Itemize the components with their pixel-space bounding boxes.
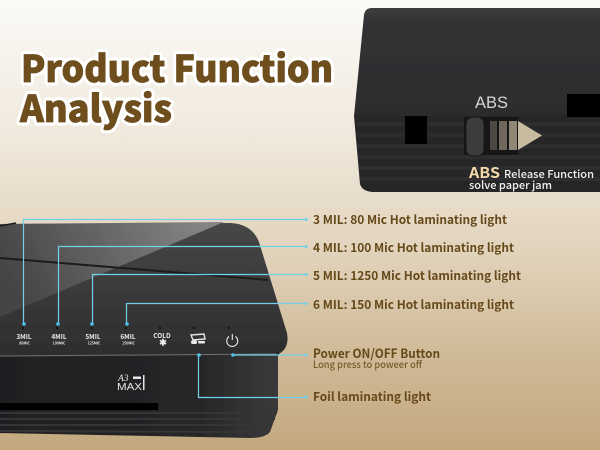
panel indicator dots — [22, 327, 230, 329]
glossy reflection — [0, 222, 224, 317]
laminator top face — [0, 223, 288, 357]
ABS caption: ABS — [468, 162, 500, 183]
panel labels: ✱ — [159, 336, 167, 348]
product photo: ABS release side of the laminator — [354, 8, 600, 192]
callout: 5 MIL — [90, 267, 521, 326]
callout: power button — [231, 343, 440, 371]
ABS slider knob — [466, 117, 484, 156]
feed slot — [0, 403, 158, 410]
callout: 4 MIL — [56, 239, 514, 326]
panel labels: 5MIL — [85, 331, 101, 341]
panel labels: 3MIL — [16, 331, 32, 341]
A3 MAX logo: A3 — [117, 374, 129, 384]
direction arrow — [518, 121, 542, 150]
front face — [0, 340, 288, 438]
callout: 6 MIL: 6 MIL: 150 Mic Hot laminating light — [313, 296, 514, 313]
panel labels: COLD — [153, 330, 171, 340]
callout: 3 MIL — [22, 211, 507, 326]
panel labels: 150MIC — [122, 342, 136, 346]
ABS caption: Release Function — [504, 166, 594, 182]
ABS caption: solve paper jam — [469, 177, 552, 193]
printer body top face — [354, 8, 600, 116]
title: Analysis — [19, 79, 172, 133]
top-left groove fragment — [0, 223, 16, 226]
callout: foil: Foil laminating light — [313, 388, 431, 405]
callout: foil — [197, 353, 431, 405]
A3 MAX logo — [117, 374, 144, 393]
panel labels: 125MIC — [88, 342, 101, 346]
title: Product Function — [21, 39, 333, 93]
ribs — [356, 124, 600, 179]
product photo: laminator control panel — [0, 222, 288, 438]
black outlet right — [567, 94, 600, 117]
front edge highlight — [0, 354, 276, 356]
ribbed lower body — [354, 116, 600, 192]
top panel groove — [0, 258, 268, 280]
title — [19, 39, 333, 133]
ABS caption — [468, 162, 594, 193]
paper slot left — [405, 116, 427, 144]
panel labels: 6MIL — [120, 331, 136, 341]
panel labels: 4MIL — [51, 331, 67, 341]
icon: power — [227, 334, 238, 346]
panel labels: 80MIC — [19, 342, 30, 346]
callout: power button: Long press to poweer off — [313, 356, 423, 371]
icon: foil rolls — [191, 334, 205, 344]
callout: power button: Power ON/OFF Button — [313, 343, 440, 362]
callout: 6 MIL — [125, 296, 514, 326]
ABS slider stripes — [490, 121, 517, 150]
A3 MAX logo: MAX — [117, 382, 142, 393]
panel labels: 100MIC — [53, 342, 66, 346]
ABS slider track — [464, 117, 518, 155]
title: Analysis — [19, 79, 172, 133]
title: Product Function — [21, 39, 333, 93]
ribs on lower front — [0, 413, 277, 432]
callout: 4 MIL: 4 MIL: 100 Mic Hot laminating light — [313, 239, 514, 256]
panel labels — [16, 330, 171, 348]
callout: 3 MIL: 3 MIL: 80 Mic Hot laminating light — [313, 211, 507, 228]
ABS engraved label: ABS — [475, 94, 508, 112]
callout: 5 MIL: 5 MIL: 1250 Mic Hot laminating light — [313, 267, 521, 284]
